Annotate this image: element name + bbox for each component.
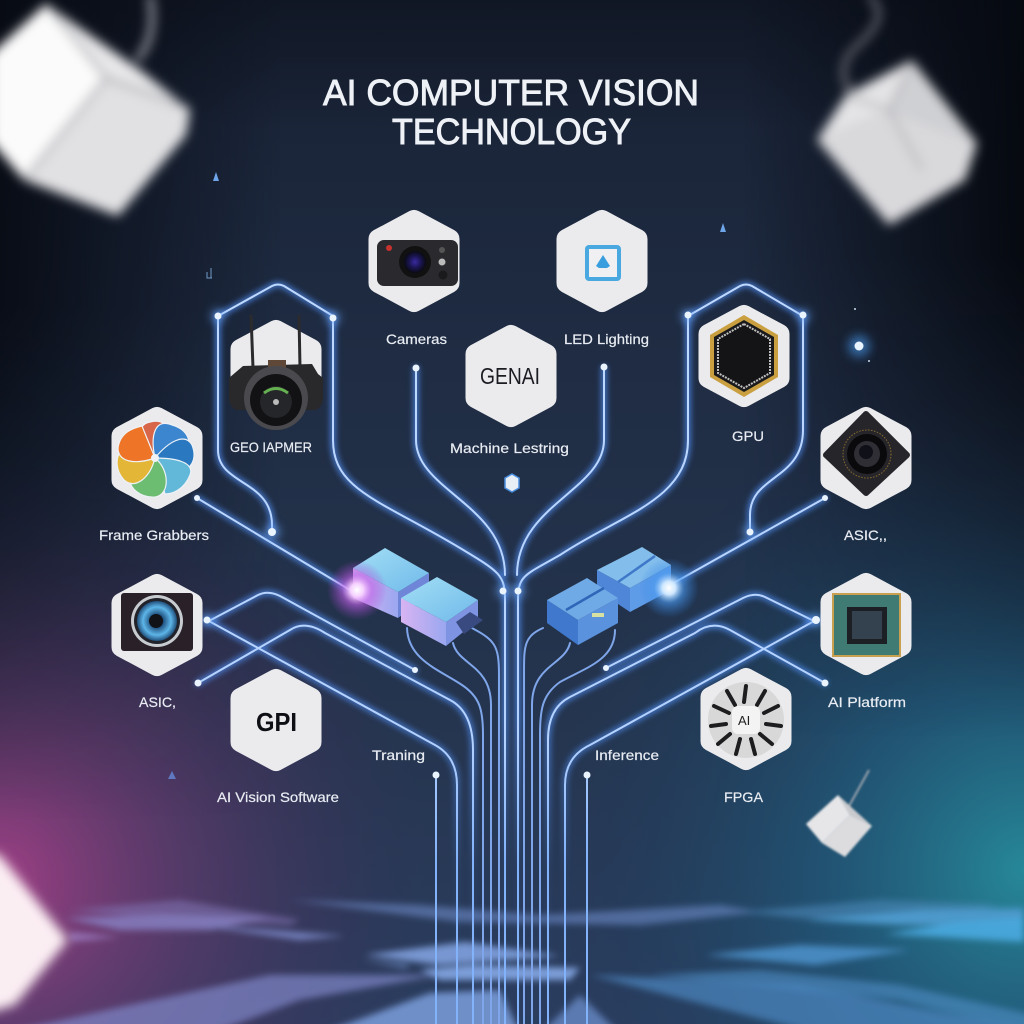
junction dots: [194, 310, 828, 778]
icon: lens module: [121, 593, 193, 651]
label: Machine Lestring: Machine Lestring: [450, 440, 569, 456]
icon: diamond camera: [826, 414, 907, 493]
node: GPI: GPI: [256, 707, 297, 737]
box cables: [407, 627, 615, 1024]
node: GEO camera: [229, 315, 323, 430]
glow under lines: [197, 284, 825, 1024]
node: Cameras: [377, 220, 458, 302]
label: AI Platform: AI Platform: [828, 694, 906, 710]
label: Frame Grabbers: Frame Grabbers: [99, 527, 209, 543]
label: ASIC right: ASIC,,: [844, 527, 887, 543]
floor light streaks: [0, 900, 1024, 1024]
node: LED Lighting: [566, 220, 638, 302]
icon: color wheel: [117, 421, 194, 497]
label: LED Lighting: LED Lighting: [564, 331, 649, 347]
hub: left boxes: [353, 548, 483, 646]
label: ASIC left: ASIC,: [139, 694, 176, 710]
icon: DSLR camera: [229, 315, 323, 430]
node: ASIC left: [121, 584, 193, 666]
node: FPGA: [708, 678, 784, 760]
icon: processor chip: [833, 594, 900, 656]
label: Traning: Traning: [372, 747, 425, 763]
cube: bottom left: [0, 850, 68, 1015]
title: TECHNOLOGY: [392, 111, 631, 152]
title: [323, 72, 699, 152]
bright cores: [197, 284, 825, 1024]
label: GPU: GPU: [732, 428, 764, 444]
node: Frame Grabbers: [117, 417, 194, 499]
hub: right boxes: [547, 547, 671, 645]
icon: hexagonal chip: [710, 315, 778, 397]
circuit lines: [197, 284, 825, 1024]
sparkles: [168, 172, 870, 779]
icon: camera: [377, 240, 458, 286]
node: GENAI: [476, 335, 546, 417]
flare: right: [639, 558, 699, 618]
node: GPU: [708, 315, 780, 397]
node: AI Platform: [830, 583, 902, 665]
cube: top right: [817, 0, 977, 225]
label: GEO IAPMER: GEO IAPMER: [230, 439, 312, 455]
label: FPGA: FPGA: [724, 789, 764, 805]
small hex node: [505, 474, 519, 492]
title: AI COMPUTER VISION: [323, 72, 699, 113]
cube: top left: [0, 0, 190, 216]
cube: bottom right: [806, 770, 872, 857]
icon: LED square: [587, 247, 619, 279]
icon: AI chip with fins: AI: [738, 713, 750, 728]
label: AI Vision Software: AI Vision Software: [217, 789, 339, 805]
node: GPI: [240, 679, 312, 761]
flare: left: [327, 560, 387, 620]
node: ASIC right: [826, 414, 907, 499]
label: Inference: Inference: [595, 747, 659, 763]
label: Cameras: Cameras: [386, 331, 447, 347]
node: GENAI: GENAI: [480, 363, 540, 389]
